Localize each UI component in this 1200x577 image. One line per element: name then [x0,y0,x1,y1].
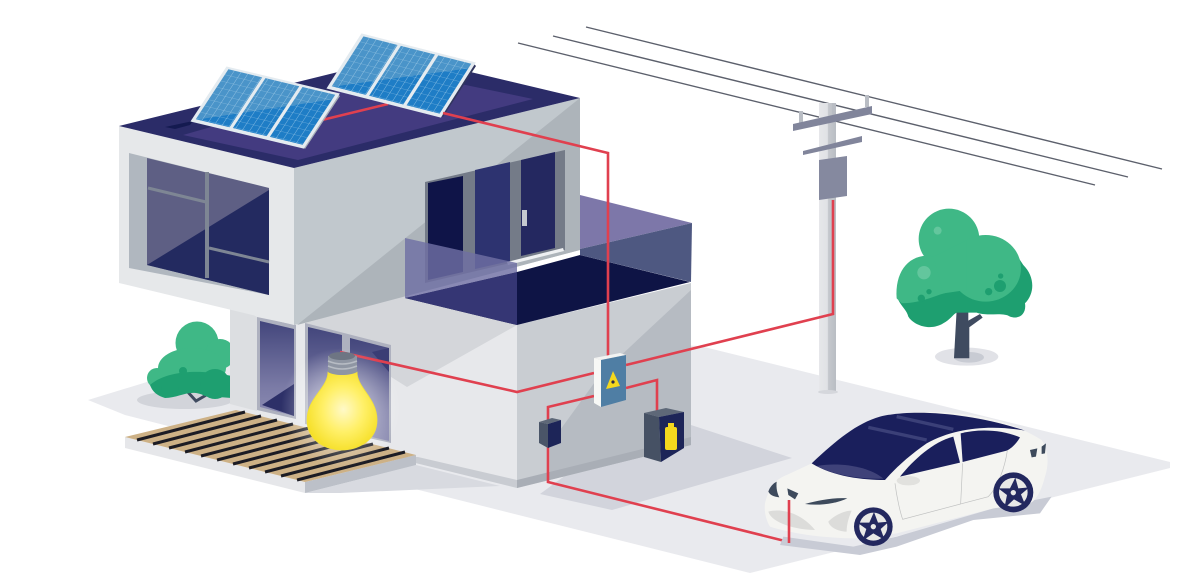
car body [765,412,1048,538]
ground plane [88,330,1170,573]
utility pole [793,95,872,394]
charging plugs [787,488,798,499]
solar panel right [326,33,476,118]
front wheel [854,507,893,546]
car shadow [780,497,1052,555]
lower floor right wall [517,283,691,488]
upper floor diagonal shade [297,98,580,325]
deck shadow on ground [305,465,500,493]
bumper details [768,511,815,530]
balcony glass rail [405,195,692,298]
right door glass [305,323,391,443]
red charging cable to car [788,500,790,543]
lower floor left wall [230,300,517,488]
windshield and roof [812,413,1025,480]
solar panel left [190,66,340,149]
door lines [895,451,1007,519]
wall diagonal shade [550,290,691,480]
column side [230,300,257,411]
small inverter box [539,418,561,448]
rear wheel [993,472,1033,512]
red wire between solar panels [322,104,388,120]
breaker panel [594,353,626,407]
power lines [518,27,1162,185]
wall base band [391,457,517,488]
house shadow on ground [540,425,792,510]
wall base shade [517,437,691,488]
large window [129,153,269,295]
upper floor left face [119,126,294,325]
left door glass [257,317,296,419]
side windows [900,437,960,477]
tree [896,209,1032,366]
balcony floor [405,255,690,325]
roof highlights [868,417,953,440]
overhang shadow on wall [305,295,517,387]
roof [119,56,580,168]
balcony door [425,150,565,283]
bush [137,322,235,409]
red wiring [340,113,833,542]
light bulb [281,348,401,468]
electric car [765,412,1052,555]
headlight [805,498,847,505]
deck [125,410,416,493]
upper floor right face [294,98,580,325]
side mirror [897,476,920,485]
battery storage [644,408,684,462]
